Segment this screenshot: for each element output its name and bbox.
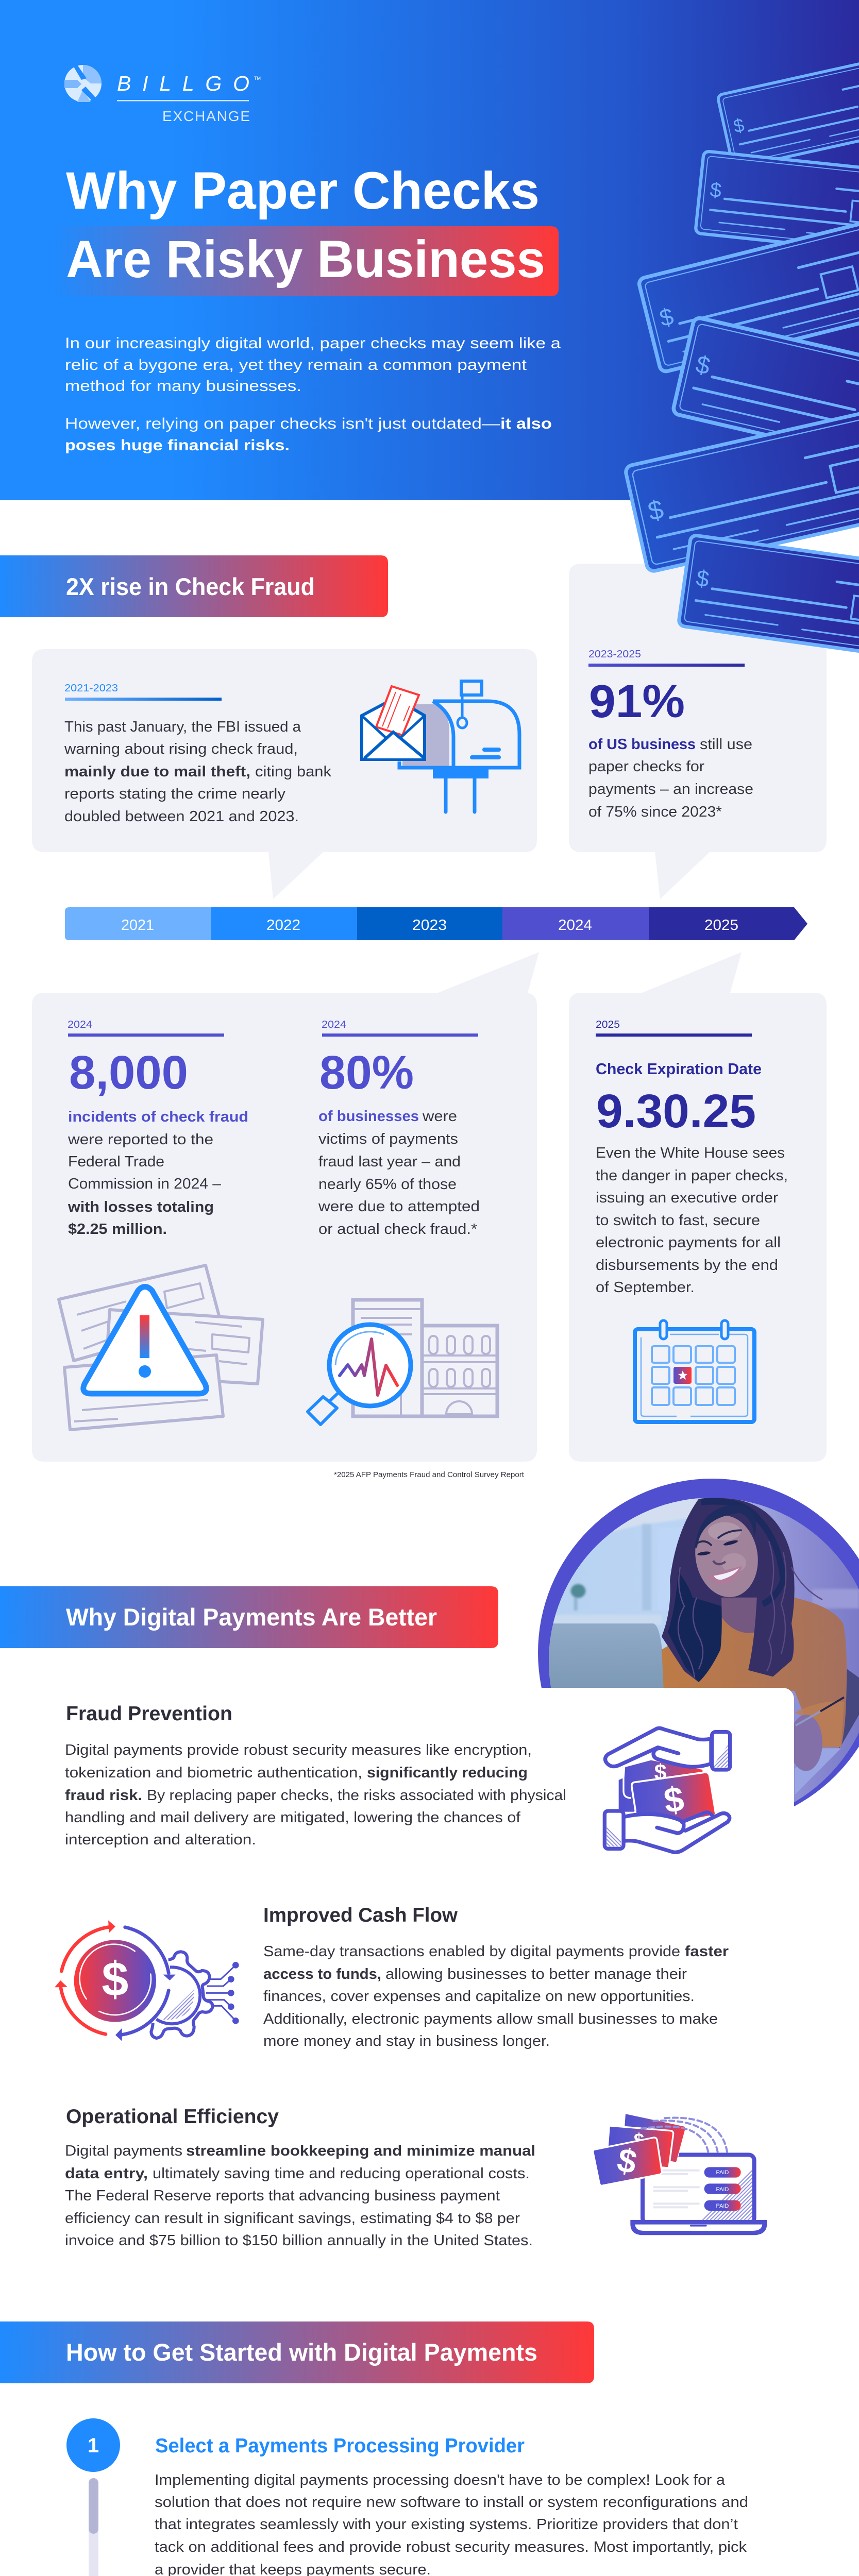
stat: 80% of businesses: 80% (319, 1046, 414, 1099)
text block: Operational Efficiency: Digital payments (65, 2143, 182, 2159)
logo: BillGO Exchange header: TM (254, 76, 261, 81)
panel: white card for benefits (0, 1688, 794, 1904)
title: Why Paper Checks (66, 161, 540, 220)
text block: Operational Efficiency: Operational Efficiency (66, 2106, 279, 2128)
icon: calendar (635, 1320, 754, 1422)
icon: laptop with paid invoices and money (593, 2113, 767, 2235)
stat: 80% of businesses: of businesses (318, 1108, 419, 1125)
check 5: $ (645, 495, 666, 527)
stat: 8,000 incidents (68, 1019, 248, 1238)
timeline segment 2021: 2021 (121, 917, 154, 934)
progress connector 1 (89, 2478, 98, 2576)
panel: 2025 check expiration date: issuing an executive order (596, 1190, 778, 1206)
text block: Improved Cash Flow: Improved Cash Flow (263, 1904, 458, 1926)
text block: Improved Cash Flow: finances, cover expenses and capitalize on new opportunities. (263, 1988, 695, 2005)
check 4 (672, 317, 859, 495)
PAID badge: PAID (716, 2187, 729, 2193)
panel: 2023-2025 91% stat (569, 564, 827, 899)
panel: 2025 check expiration date: Check Expiration Date (596, 1060, 762, 1078)
check 2 (695, 151, 859, 264)
section banner: How to Get Started with Digital Payments (0, 2321, 594, 2383)
stat: 8,000 incidents: $2.25 million. (68, 1221, 167, 1238)
check 6: $ (695, 566, 711, 592)
stat: 80% of businesses: fraud last year – and (318, 1154, 461, 1170)
icon: cash flow cycle with gear (55, 1920, 239, 2041)
logo: BillGO Exchange header (64, 65, 261, 124)
check 3: $ (657, 302, 676, 332)
timeline 2021-2025 (65, 907, 807, 940)
panel: 2021-2023 FBI warning: citing bank (255, 764, 332, 780)
timeline segment 2024: 2024 (558, 917, 592, 934)
panel: 2025 check expiration date: Even the White House sees (596, 1145, 785, 1161)
hero intro text (65, 335, 561, 454)
check 3 (638, 194, 859, 372)
panel: 2025 check expiration date: electronic payments for all (596, 1234, 781, 1251)
step 1 text (155, 2435, 748, 2576)
panel: 2023-2025 91% stat: 2023-2025 (588, 649, 641, 660)
panel: 2021-2023 FBI warning (32, 649, 537, 899)
title: Are Risky Business (66, 230, 545, 289)
title highlight banner (52, 226, 559, 296)
text block: Fraud Prevention: Digital payments provide robust security measures like encryption, (65, 1742, 532, 1758)
section banner: Why Digital Payments Are Better: Why Digital Payments Are Better (66, 1603, 437, 1631)
stat: 8,000 incidents: 2024 (68, 1019, 92, 1030)
stat: 80% of businesses: 2024 (322, 1019, 346, 1030)
panel: 2021-2023 FBI warning: 2021-2023 (64, 683, 118, 694)
timeline segment 2025 (649, 907, 807, 940)
stat: 80% of businesses: were (422, 1108, 457, 1125)
footnote: *2025 AFP Payments Fraud and Control Survey Report (334, 1470, 525, 1479)
timeline segment 2023 (357, 907, 502, 940)
check 4: $ (693, 350, 713, 380)
icon: cash flow cycle with gear: $ (102, 1952, 128, 2006)
panel: 2023-2025 91% stat: 91% (589, 676, 685, 727)
icon: hands protecting money: $ (654, 1760, 667, 1785)
panel: 2024 stats (32, 952, 539, 1462)
check 1 (717, 36, 859, 169)
panel: 2025 check expiration date (569, 952, 827, 1462)
panel: hero background (0, 0, 859, 500)
text block: Fraud Prevention: tokenization and biometric authentication, (65, 1765, 362, 1781)
PAID badge (704, 2167, 741, 2178)
step 1 text: solution that does not require new software to install or system reconfigurations and (155, 2494, 748, 2511)
icon: hands protecting money: $ (662, 1779, 686, 1821)
panel: 2023-2025 91% stat: of 75% since 2023* (588, 804, 722, 820)
panel: 2023-2025 91% stat: paper checks for (588, 758, 704, 775)
panel: 2021-2023 FBI warning: This past January, the FBI issued a (64, 719, 301, 735)
icon: checks with warning triangle (59, 1265, 263, 1430)
panel: 2025 check expiration date: 2025 (596, 1019, 620, 1030)
check 1: $ (732, 114, 746, 137)
text block: Fraud Prevention: By replacing paper checks, the risks associated with physical (147, 1787, 566, 1804)
icon: hands protecting money (604, 1728, 730, 1852)
timeline segment 2022: 2022 (266, 917, 300, 934)
PAID badge: PAID (716, 2203, 729, 2209)
panel: 2025 check expiration date: 9.30.25 (596, 1085, 756, 1138)
hero intro text: it also (500, 415, 552, 432)
panel: 2021-2023 FBI warning: warning about rising check fraud, (64, 741, 298, 757)
step 1 number badge: 1 (88, 2434, 99, 2457)
timeline segment 2021 (65, 907, 211, 940)
section banner: How to Get Started with Digital Payments: How to Get Started with Digital Payments (66, 2338, 537, 2366)
panel: 2021-2023 FBI warning: mainly due to mail theft, (64, 764, 250, 780)
text block: Improved Cash Flow (263, 1904, 729, 2049)
hero intro text: In our increasingly digital world, paper checks may seem like a (65, 335, 561, 352)
hero intro text: However, relying on paper checks isn't just outdated— (65, 415, 500, 432)
PAID badge (704, 2183, 741, 2194)
text block: Improved Cash Flow: faster (685, 1943, 729, 1960)
section banner: Why Digital Payments Are Better (0, 1586, 498, 1648)
stat: 8,000 incidents: 8,000 (69, 1046, 188, 1099)
text block: Operational Efficiency: data entry, (65, 2165, 148, 2182)
text block: Operational Efficiency: The Federal Reserve reports that advancing business payment (65, 2188, 500, 2204)
PAID badge: PAID (716, 2170, 729, 2176)
text block: Operational Efficiency: ultimately saving time and reducing operational costs. (153, 2165, 530, 2182)
text block: Fraud Prevention: fraud risk. (65, 1787, 142, 1804)
panel: 2025 check expiration date: to switch to fast, secure (596, 1212, 760, 1229)
logo: BillGO Exchange header: EXCHANGE (162, 108, 250, 124)
icon: laptop with paid invoices and money: $ (634, 2130, 644, 2151)
panel: 2023-2025 91% stat: of US business (588, 736, 696, 753)
hero intro text: poses huge financial risks. (65, 437, 290, 454)
panel: 2025 check expiration date: the danger in paper checks, (596, 1167, 788, 1184)
timeline segment 2022 (211, 907, 357, 940)
text block: Fraud Prevention: interception and alteration. (65, 1832, 256, 1848)
text block: Operational Efficiency: efficiency can result in significant savings, estimating $4 to $8 per (65, 2210, 520, 2227)
check 5 (625, 380, 859, 572)
timeline segment 2023: 2023 (412, 917, 447, 934)
panel: 2021-2023 FBI warning: doubled between 2021 and 2023. (64, 808, 299, 825)
step 1 number badge (66, 2418, 120, 2472)
stat: 8,000 incidents: Federal Trade (68, 1154, 164, 1170)
check 6 (678, 535, 859, 672)
panel: 2023-2025 91% stat: payments – an increase (588, 781, 753, 798)
step 1 text: that integrates seamlessly with your existing systems. Prioritize providers that don’t (155, 2516, 738, 2533)
stat: 80% of businesses: nearly 65% of those (318, 1176, 457, 1193)
panel: 2023-2025 91% stat: still use (700, 736, 752, 753)
text block: Fraud Prevention (65, 1703, 566, 1848)
text block: Improved Cash Flow: allowing businesses to better manage their (385, 1966, 687, 1982)
stat: 8,000 incidents: incidents of check fraud (68, 1109, 248, 1125)
stat: 8,000 incidents: Commission in 2024 – (68, 1176, 222, 1192)
timeline segment 2024 (502, 907, 649, 940)
text block: Fraud Prevention: handling and mail delivery are mitigated, lowering the chances of (65, 1809, 521, 1826)
stat: 8,000 incidents: with losses totaling (68, 1199, 214, 1215)
text block: Operational Efficiency (65, 2106, 535, 2249)
text block: Fraud Prevention: significantly reducing (367, 1765, 528, 1781)
section banner: 2X rise in Check Fraud (0, 555, 388, 617)
stat: 80% of businesses: or actual check fraud.* (318, 1221, 477, 1238)
stat: 80% of businesses: victims of payments (318, 1131, 458, 1147)
panel: 2025 check expiration date: disbursements by the end (596, 1257, 778, 1274)
step 1 text: tack on additional fees and provide robust security measures. Most importantly, pick (155, 2539, 747, 2555)
title (52, 161, 559, 296)
check 2: $ (709, 178, 722, 202)
hero intro text: relic of a bygone era, yet they remain a common payment (65, 357, 527, 374)
icon: buildings with magnifier chart (308, 1300, 497, 1425)
timeline segment 2025: 2025 (704, 917, 738, 934)
hero intro text: method for many businesses. (65, 378, 301, 395)
illustration: stack of paper checks (625, 36, 859, 672)
panel: 2025 check expiration date: of September. (596, 1279, 695, 1296)
panel: 2021-2023 FBI warning: reports stating the crime nearly (64, 786, 286, 802)
section banner: 2X rise in Check Fraud: 2X rise in Check Fraud (66, 573, 315, 600)
text block: Operational Efficiency: streamline bookkeeping and minimize manual (186, 2143, 535, 2159)
stat: 8,000 incidents: were reported to the (68, 1131, 213, 1148)
text block: Operational Efficiency: invoice and $75 billion to $150 billion annually in the United States. (65, 2232, 533, 2249)
icon: mailbox with envelope (362, 681, 519, 812)
text block: Improved Cash Flow: more money and stay in business longer. (263, 2033, 550, 2049)
text block: Improved Cash Flow: Additionally, electronic payments allow small businesses to make (263, 2011, 718, 2027)
text block: Improved Cash Flow: access to funds, (263, 1966, 381, 1982)
PAID badge (704, 2200, 741, 2211)
stat: 80% of businesses (318, 1019, 480, 1238)
step 1 text: Implementing digital payments processing doesn't have to be complex! Look for a (155, 2472, 726, 2488)
photo: smiling woman in orange top (536, 1476, 859, 1827)
step 1 text: Select a Payments Processing Provider (155, 2435, 525, 2457)
text block: Improved Cash Flow: Same-day transactions enabled by digital payments provide (263, 1943, 680, 1960)
logo: BillGO Exchange header: BILLGO (117, 72, 249, 95)
icon: laptop with paid invoices and money: $ (614, 2141, 640, 2181)
stat: 80% of businesses: were due to attempted (318, 1198, 480, 1215)
text block: Fraud Prevention: Fraud Prevention (66, 1703, 232, 1725)
